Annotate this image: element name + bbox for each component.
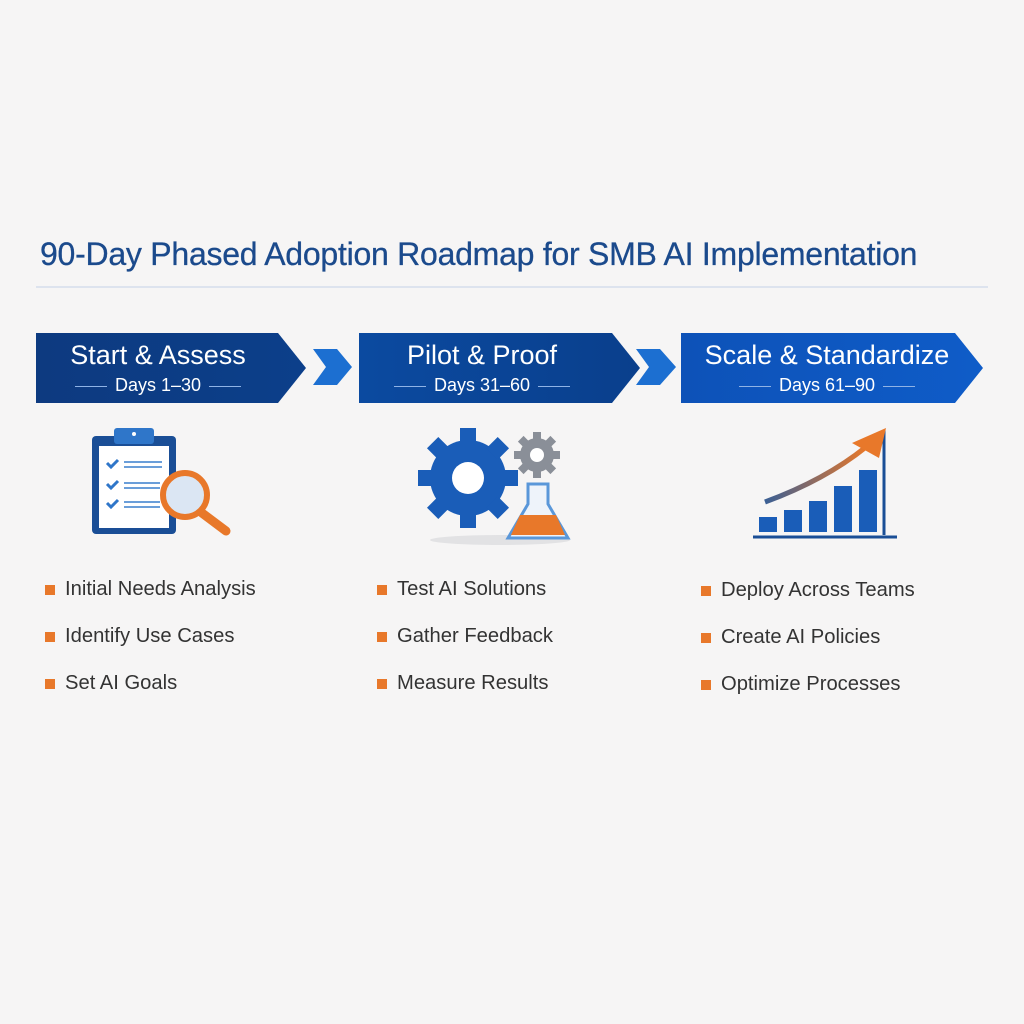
banner 1 text [70, 340, 246, 395]
icon: clipboard with magnifier [92, 428, 230, 536]
banner 3 text: Scale & Standardize [705, 340, 949, 370]
banner 3 text: Days 61–90 [779, 375, 875, 395]
list: phase 2: Gather Feedback [397, 625, 553, 647]
list: phase 3: Create AI Policies [721, 626, 880, 648]
title: 90-Day Phased Adoption Roadmap for SMB AI Implementation [40, 236, 917, 272]
banner 2 text: Days 31–60 [434, 375, 530, 395]
list: phase 1: Set AI Goals [65, 672, 177, 694]
list: phase 2 [377, 578, 553, 694]
list: phase 3 [701, 579, 915, 695]
banners [36, 333, 983, 403]
banner 1 shape [36, 333, 306, 403]
list: phase 2: Measure Results [397, 672, 548, 694]
list: phase 1 [45, 578, 256, 694]
banner 2 shape [359, 333, 640, 403]
arrow 1 [313, 349, 352, 385]
icon: growth chart [753, 428, 897, 538]
banner 1 text: Days 1–30 [115, 375, 201, 395]
banner 2 text: Pilot & Proof [407, 340, 557, 370]
banner 2 text [394, 340, 570, 395]
banner 3 shape [681, 333, 983, 403]
list: phase 1: Initial Needs Analysis [65, 578, 256, 600]
arrow 2 [636, 349, 676, 385]
list: phase 3: Deploy Across Teams [721, 579, 915, 601]
list: phase 3: Optimize Processes [721, 673, 900, 695]
list: phase 2: Test AI Solutions [397, 578, 546, 600]
banner 3 text [705, 340, 949, 395]
list: phase 1: Identify Use Cases [65, 625, 234, 647]
banner 1 text: Start & Assess [70, 340, 246, 370]
icon: gears and flask [418, 428, 570, 545]
